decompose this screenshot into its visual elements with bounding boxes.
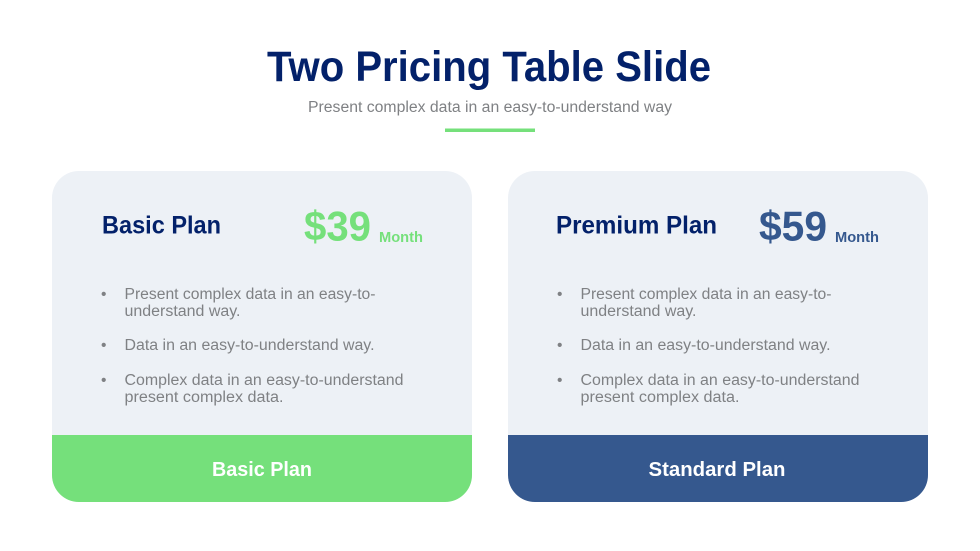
- feature list: Present complex data in an easy-to-: [580, 286, 832, 303]
- title accent underline: [445, 128, 535, 132]
- plan name: Basic Plan: [102, 212, 221, 240]
- subtitle: Present complex data in an easy-to-understand way: [308, 99, 672, 116]
- feature list: [101, 286, 404, 406]
- feature list: understand way.: [124, 303, 240, 320]
- panel: premium plan: [508, 171, 928, 502]
- price period: Month: [379, 229, 423, 246]
- footer band: [508, 435, 928, 502]
- footer band: [52, 435, 472, 502]
- feature list: [557, 286, 860, 406]
- feature list: present complex data.: [580, 389, 740, 406]
- feature list: •: [557, 337, 562, 354]
- feature list: Complex data in an easy-to-understand: [580, 372, 860, 389]
- price: $59: [759, 202, 827, 250]
- feature list: Complex data in an easy-to-understand: [124, 372, 404, 389]
- footer label: Basic Plan: [212, 459, 312, 481]
- footer label: Standard Plan: [648, 459, 786, 481]
- feature list: •: [557, 372, 562, 389]
- feature list: present complex data.: [124, 389, 284, 406]
- feature list: understand way.: [580, 303, 696, 320]
- card background: [508, 171, 928, 502]
- feature list: •: [101, 286, 106, 303]
- feature list: •: [557, 286, 562, 303]
- price period: Month: [835, 229, 879, 246]
- price: $39: [304, 202, 371, 250]
- panel: basic plan: [52, 171, 472, 502]
- feature list: Data in an easy-to-understand way.: [124, 337, 374, 354]
- card background: [52, 171, 472, 502]
- plan name: Premium Plan: [556, 212, 717, 240]
- feature list: •: [101, 337, 106, 354]
- title: Two Pricing Table Slide: [267, 43, 711, 91]
- feature list: •: [101, 372, 106, 389]
- feature list: Data in an easy-to-understand way.: [580, 337, 830, 354]
- feature list: Present complex data in an easy-to-: [124, 286, 376, 303]
